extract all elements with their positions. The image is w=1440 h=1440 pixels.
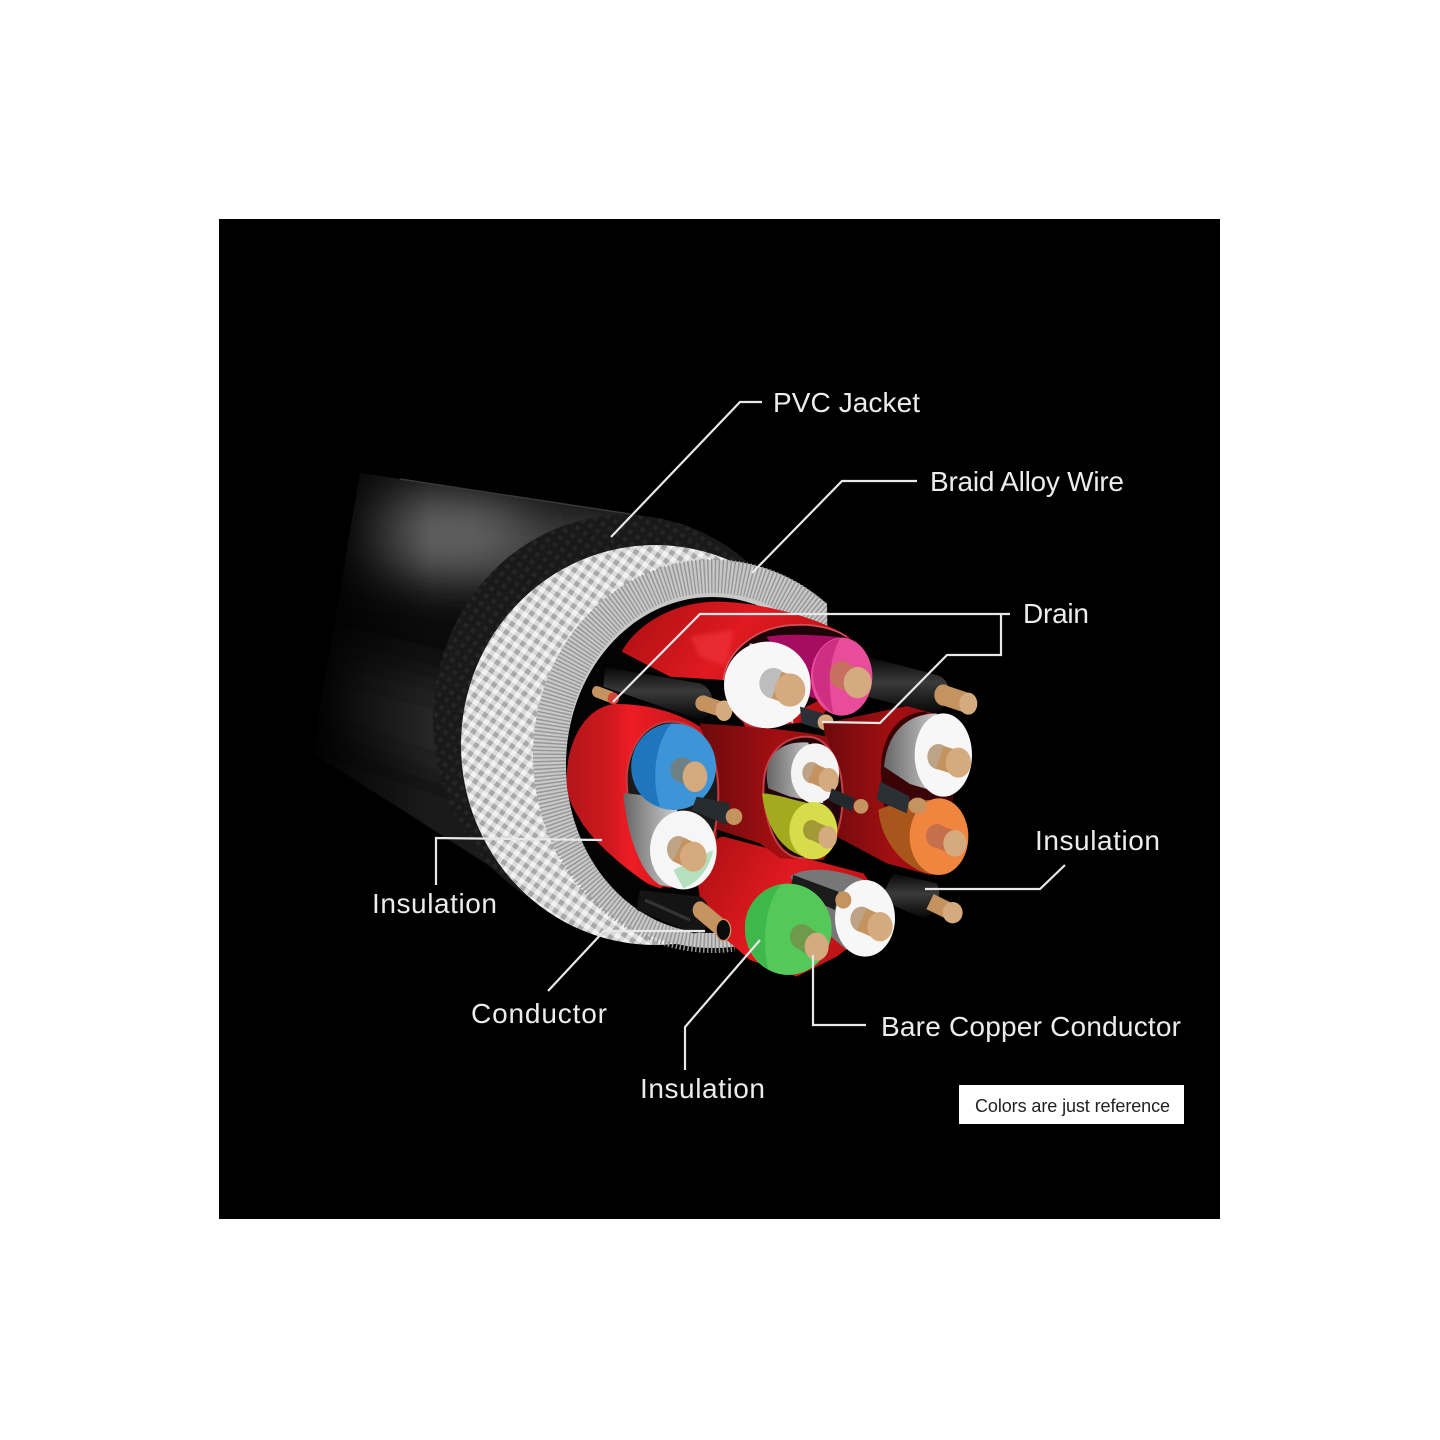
black wire upper left — [603, 667, 732, 721]
white wire left — [623, 793, 717, 889]
orange wire — [878, 798, 968, 875]
leader lines: Drain — [613, 614, 1010, 723]
cable illustration — [300, 460, 977, 1000]
braid cut face — [533, 560, 893, 948]
blue wire — [631, 723, 716, 810]
label: PVC Jacket: PVC Jacket — [773, 387, 920, 418]
white wire top — [724, 642, 811, 728]
label: Conductor: Conductor — [471, 998, 607, 1029]
black cable bottom left with hollow conductor — [637, 890, 731, 941]
bottom red shield — [697, 837, 895, 977]
white wire centre — [767, 742, 839, 803]
top red shield — [622, 602, 860, 730]
white wire right — [884, 713, 972, 797]
leader line: Braid Alloy Wire — [752, 481, 917, 573]
right red shield — [823, 706, 972, 875]
green wire — [745, 884, 832, 975]
centre red shield — [700, 723, 868, 860]
small drain centre — [828, 788, 868, 814]
cable cavity — [566, 597, 858, 933]
small drain right — [877, 782, 927, 814]
pink wire — [767, 635, 872, 716]
black wire upper right — [867, 657, 977, 715]
leader line: Insulation left — [436, 838, 602, 885]
note: colors are just reference: Colors are just reference — [975, 1096, 1170, 1116]
braid weave side — [461, 545, 849, 945]
black background panel — [219, 219, 1220, 1219]
PVC jacket end ring — [433, 515, 817, 925]
label: Bare Copper Conductor: Bare Copper Conductor — [881, 1011, 1181, 1042]
leader line: Insulation right — [925, 865, 1065, 889]
note: colors are just reference — [959, 1085, 1184, 1124]
small drain top-left tip — [592, 686, 619, 704]
small drain centre top — [800, 707, 834, 730]
label: Insulation bottom: Insulation — [640, 1073, 765, 1104]
leader line: Bare Copper Conductor — [813, 955, 866, 1025]
label: Insulation right: Insulation — [1035, 825, 1160, 856]
PVC jacket body — [324, 473, 640, 868]
leader line: Insulation bottom — [685, 940, 760, 1070]
white wire bottom — [790, 870, 895, 957]
leader line: PVC Jacket — [611, 402, 762, 537]
black wire lower right — [880, 873, 963, 923]
label: Drain: Drain — [1023, 598, 1089, 629]
label: Braid Alloy Wire: Braid Alloy Wire — [930, 466, 1124, 497]
background mask right of braid — [735, 600, 970, 1000]
inner conductors — [567, 602, 977, 977]
left red shield — [567, 704, 742, 889]
small drain left — [692, 797, 742, 825]
yellow wire — [762, 793, 837, 859]
label: Insulation left: Insulation — [372, 888, 497, 919]
leader line: Conductor — [548, 931, 705, 991]
